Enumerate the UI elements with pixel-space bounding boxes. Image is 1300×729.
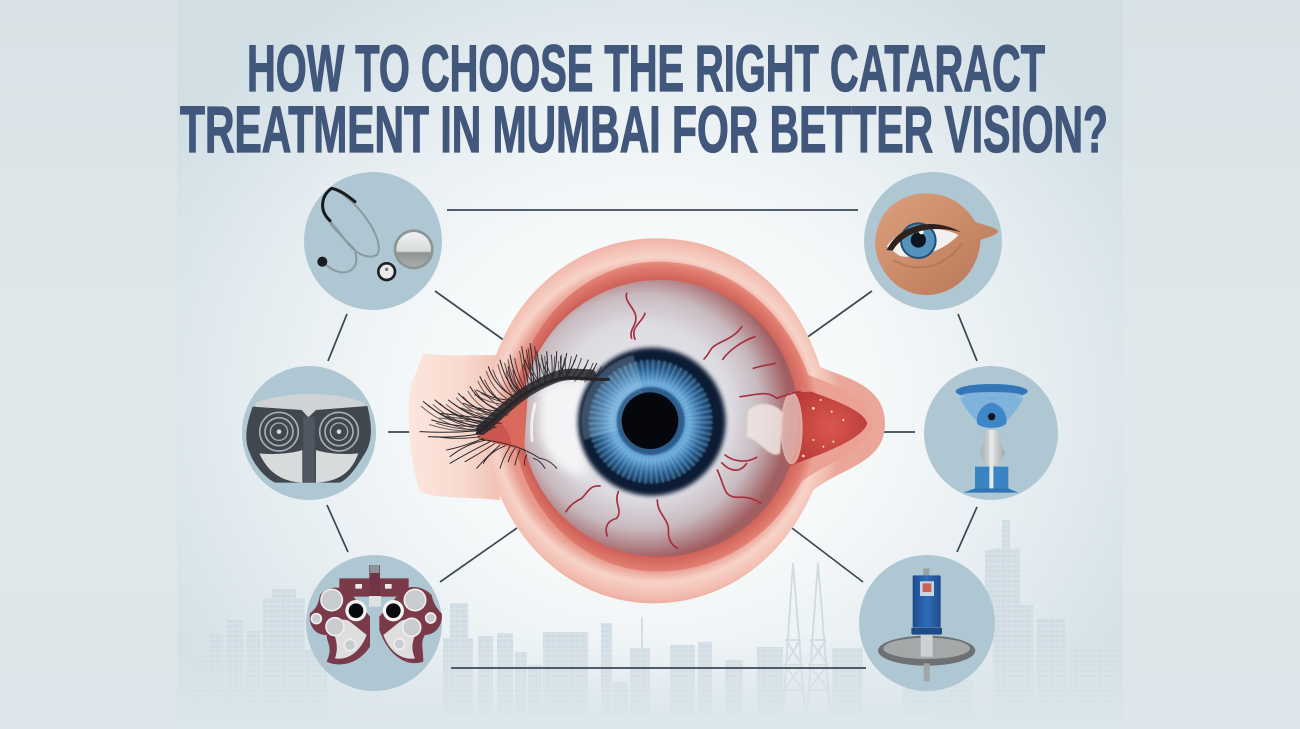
eyelashes xyxy=(420,343,608,468)
sclera highlight xyxy=(531,404,535,441)
circle: surgical probe xyxy=(859,555,995,691)
cone speckles xyxy=(802,399,844,457)
veins xyxy=(566,293,800,548)
connector lines xyxy=(327,210,977,668)
nose cone xyxy=(783,392,867,468)
circle: blue instrument xyxy=(924,366,1058,500)
inner corner xyxy=(477,387,528,450)
circle: phoropter xyxy=(306,555,442,691)
circle: binocular device xyxy=(242,366,376,500)
caruncle xyxy=(478,422,512,444)
central eye illustration xyxy=(409,238,885,603)
title xyxy=(180,31,1108,166)
outer eye wall xyxy=(485,238,885,603)
lens cylinder xyxy=(782,393,802,463)
skyline fade xyxy=(177,640,1123,729)
lens opacity xyxy=(747,404,783,455)
sclera xyxy=(522,280,798,557)
skyline: twin towers xyxy=(783,563,830,712)
circle: eye portrait xyxy=(864,172,1002,310)
pupil xyxy=(622,392,678,449)
skyline xyxy=(190,520,1117,716)
cornea shading xyxy=(540,381,590,477)
circle: stethoscope xyxy=(304,172,442,310)
inner ring xyxy=(513,262,872,572)
iris xyxy=(578,348,726,496)
eyelid tab xyxy=(409,353,500,500)
